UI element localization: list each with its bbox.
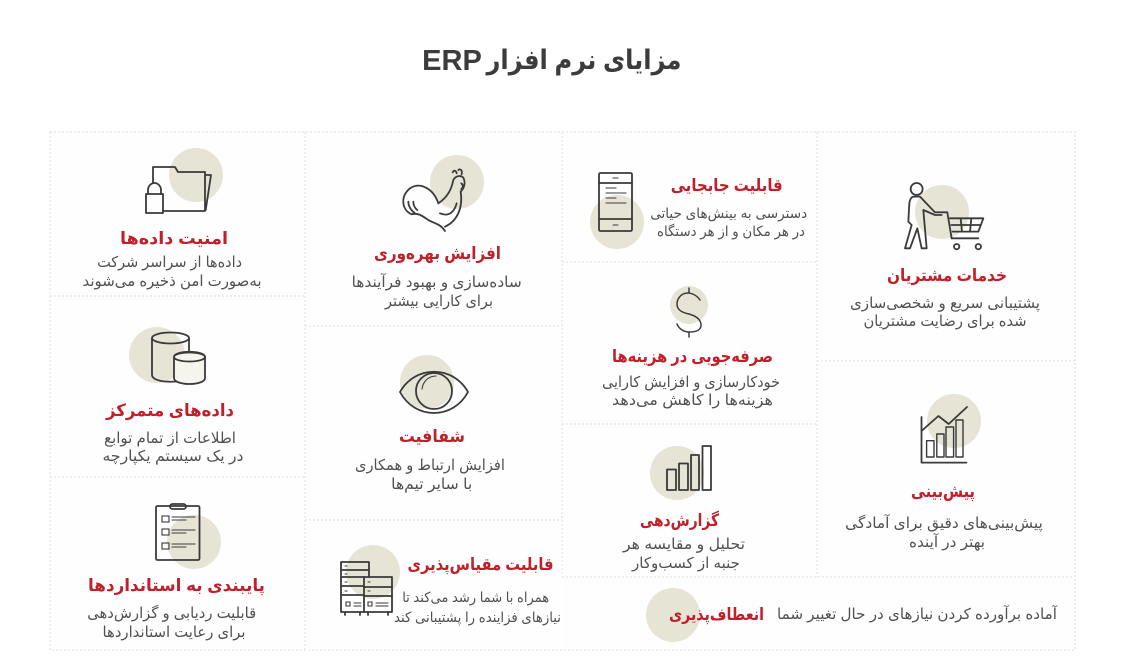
panel: data security [52,134,303,294]
heading: پایبندی به استانداردها [88,576,265,596]
panel: scalability: نیازهای فزاینده را پشتیبانی کند [394,609,561,626]
heading: شفافیت [399,427,465,446]
panel: centralized data: در یک سیستم یکپارچه [102,448,244,466]
text block: آماده برآورده کردن نیازهای در حال تغییر شما [777,605,1058,623]
title: مزایای نرم افزار [485,45,682,76]
panel: data security: به‌صورت امن ذخیره می‌شوند [82,273,262,290]
icon: eye [400,355,468,413]
panel: productivity: برای کارایی بیشتر [384,293,493,310]
panel: forecasting [819,363,1073,575]
text block: داده‌ها از سراسر شرکت [97,254,242,271]
text block: خودکارسازی و افزایش کارایی [602,374,780,391]
panel: customer service: شده برای رضایت مشتریان [864,313,1026,330]
icon: circle accent [646,588,700,642]
heading: امنیت داده‌ها [120,229,228,248]
panel: scalability [307,522,561,648]
panel: cost saving: هزینه‌ها را کاهش می‌دهد [612,392,773,409]
heading: خدمات مشتریان [887,266,1007,286]
text block: اطلاعات از تمام توابع [104,430,236,447]
panel: productivity [307,134,560,324]
icon: folder and lock [146,148,223,213]
panel: cost saving [564,264,815,422]
panel: mobility: در هر مکان و از هر دستگاه [657,223,805,240]
panel: standards compliance: برای رعایت استانداردها [102,624,246,641]
heading: پیش‌بینی [911,482,975,502]
panel: flexibility [564,579,1073,648]
panel: reporting: جنبه از کسب‌وکار [631,555,740,572]
panel: transparency: با سایر تیم‌ها [391,476,472,493]
title [422,45,682,77]
text block: همراه با شما رشد می‌کند تا [402,589,549,606]
text block: تحلیل و مقایسه هر [622,536,745,553]
icon: checklist clipboard [156,504,221,569]
icon: shopper with cart [905,183,983,249]
title: ERP [422,45,482,77]
icon: forecast chart [922,394,981,463]
icon: servers [341,545,400,615]
heading: قابلیت جابجایی [671,176,783,195]
panel: mobility [564,134,815,260]
panel: customer service [819,134,1073,359]
text block: پشتیبانی سریع و شخصی‌سازی [850,295,1040,313]
panel: reporting [564,426,815,575]
text block: ساده‌سازی و بهبود فرآیندها [352,273,522,291]
text block: افزایش ارتباط و همکاری [355,457,505,474]
heading: افزایش بهره‌وری [374,244,501,264]
heading: گزارش‌دهی [640,510,719,531]
icon: mobile phone [590,173,644,249]
panel: transparency [307,328,560,518]
heading: قابلیت مقیاس‌پذیری [408,555,554,575]
icon: dollar sign [670,286,708,337]
text block: پیش‌بینی‌های دقیق برای آمادگی [845,514,1043,533]
icon: rooster [403,155,484,231]
text block: دسترسی به بینش‌های حیاتی [650,205,807,222]
panel: standards compliance [52,479,303,648]
icon: bar chart [650,446,711,500]
heading: صرفه‌جویی در هزینه‌ها [612,347,773,367]
panel: forecasting: بهتر در آینده [909,533,985,551]
heading: انعطاف‌پذیری [669,605,764,625]
heading: داده‌های متمرکز [105,401,234,421]
text block: قابلیت ردیابی و گزارش‌دهی [87,604,256,622]
icon: databases [129,327,205,384]
panel: centralized data [52,298,303,475]
